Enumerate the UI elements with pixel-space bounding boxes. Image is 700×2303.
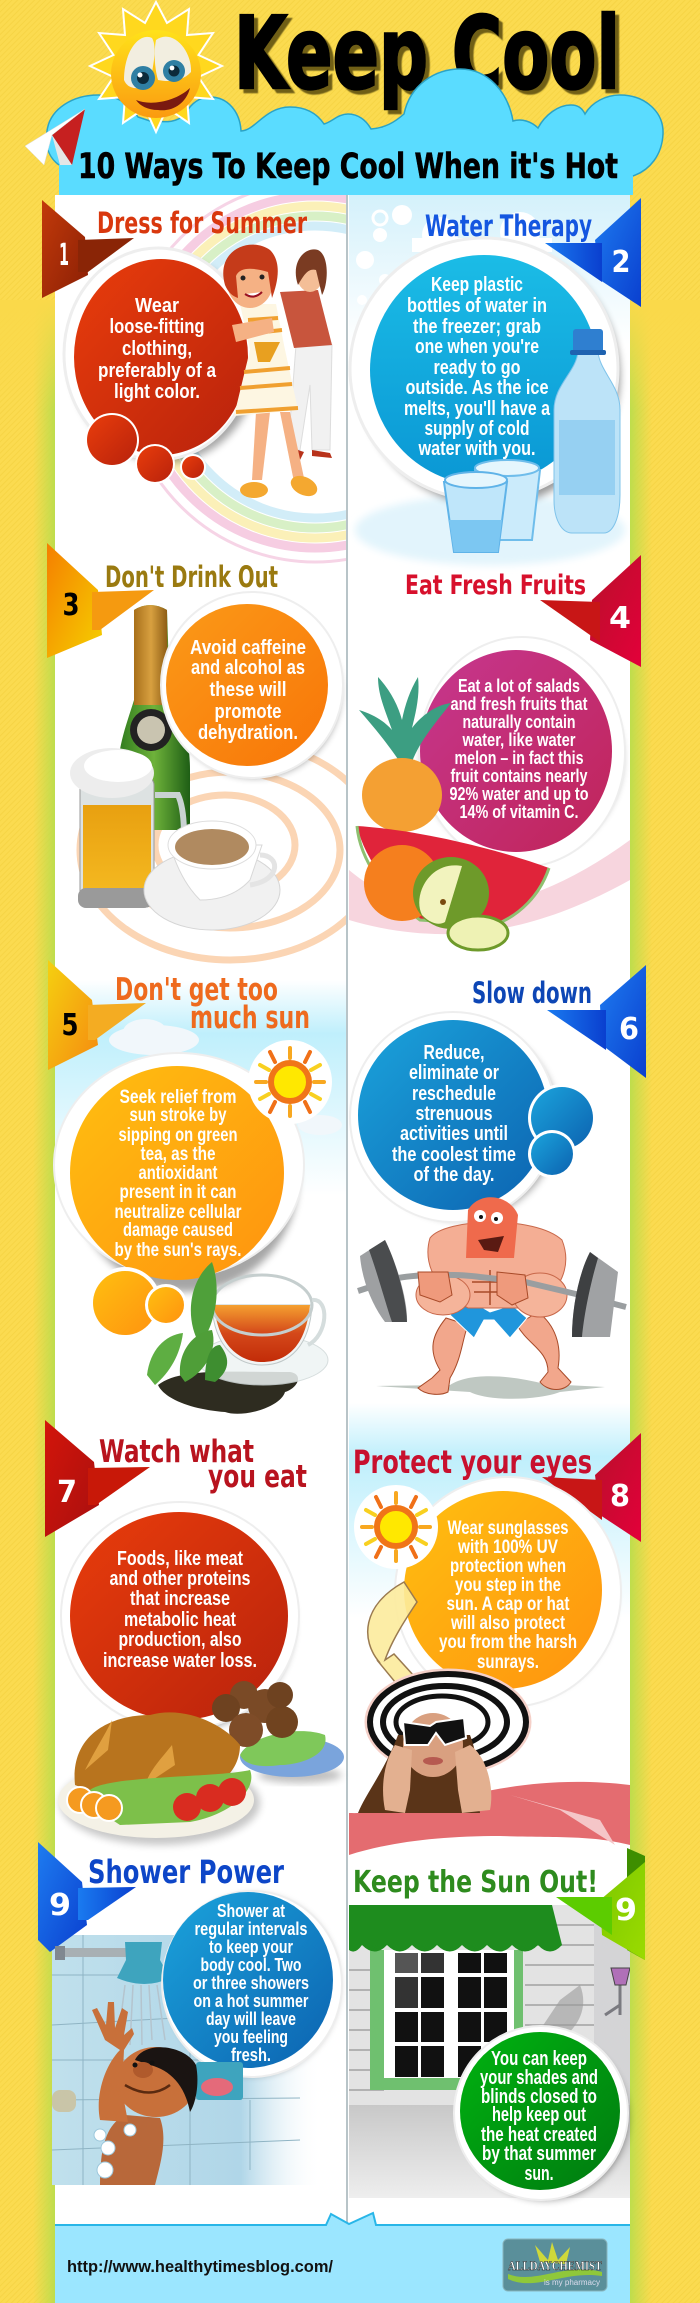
speech bubble: neutralize cellular: [114, 1202, 242, 1223]
sky background: [349, 1403, 630, 1618]
red wave: [349, 1782, 630, 1855]
speech bubble: the coolest time: [392, 1144, 516, 1166]
ribbon 5: [48, 960, 146, 1070]
tiled wall: [52, 1935, 322, 2185]
ribbon 3: 3: [62, 588, 80, 623]
speech bubble: Seek relief from: [120, 1087, 236, 1108]
speech bubble: antioxidant: [138, 1163, 218, 1184]
panel 4: eat fresh fruits: [349, 555, 641, 950]
speech bubble: metabolic heat: [124, 1609, 236, 1631]
speech bubble: ready to go: [434, 357, 520, 379]
panel 9: shower power: [38, 1842, 342, 2185]
speech bubble: to keep your: [209, 1936, 293, 1957]
speech bubble: [161, 592, 343, 778]
illustration: water bottle and glasses: [444, 329, 620, 552]
ribbon 8: [542, 1433, 641, 1542]
panel 7: watch what you eat: [45, 1420, 344, 1845]
speech bubble: you from the harsh: [439, 1632, 577, 1653]
speech bubble: melts, you'll have a: [404, 398, 551, 420]
heading: [115, 972, 310, 1036]
heading: Dress for Summer: [97, 206, 307, 240]
ribbon 10: [556, 1848, 645, 1960]
speech bubble: you step in the: [455, 1575, 561, 1596]
ribbon 4: [540, 555, 641, 667]
ribbon 4: 4: [609, 601, 631, 636]
speech bubble: production, also: [118, 1629, 242, 1651]
speech bubble: by the sun's rays.: [114, 1240, 242, 1261]
speech bubble: dehydration.: [198, 722, 298, 744]
pink swoosh: [349, 840, 630, 934]
ribbon 1: [42, 200, 134, 298]
logo: ALLDAYCHEMIST: [508, 2258, 602, 2273]
speech bubble: preferably of a: [98, 360, 217, 382]
speech bubble: reschedule: [412, 1083, 496, 1105]
speech bubble: eliminate or: [409, 1062, 499, 1084]
orange swirl: [76, 755, 346, 964]
heading: Don't get too: [115, 972, 278, 1008]
illustration: two women: [223, 245, 332, 500]
ribbon 2: [545, 198, 641, 307]
speech bubble: with 100% UV: [457, 1537, 558, 1558]
speech bubble: Avoid caffeine: [190, 637, 306, 659]
speech bubble: Wear: [135, 295, 179, 317]
speech bubble: 92% water and up to: [450, 783, 588, 804]
arrow: [368, 1582, 424, 1688]
heading: you eat: [208, 1459, 307, 1495]
speech bubble: protection when: [450, 1556, 566, 1577]
speech bubble: help keep out: [492, 2104, 586, 2126]
speech bubble: tea, as the: [140, 1144, 216, 1165]
speech bubble: [395, 1477, 621, 1707]
speech bubble: sipping on green: [118, 1125, 238, 1146]
ribbon 7: [45, 1420, 150, 1537]
speech bubble: water with you.: [418, 438, 536, 460]
illustration: woman in sun hat: [358, 1670, 530, 1813]
heading: Don't Drink Out: [105, 560, 278, 594]
speech bubble: regular intervals: [194, 1918, 308, 1939]
speech bubble: sunrays.: [477, 1652, 539, 1673]
speech bubble: water, like water: [462, 729, 576, 750]
speech bubble: on a hot summer: [194, 1990, 308, 2011]
speech bubble: light color.: [114, 381, 200, 403]
speech bubble: of the day.: [414, 1164, 494, 1186]
speech bubble: [162, 1891, 342, 2077]
illustration: house and window: [349, 1905, 630, 2198]
panel 3: don't drink out: [47, 543, 380, 960]
speech bubble: Shower at: [217, 1900, 285, 1921]
cloud: [109, 1019, 342, 1135]
ribbon 6: [547, 965, 646, 1078]
speech bubble: damage caused: [123, 1220, 233, 1241]
speech bubble: the heat created: [481, 2124, 597, 2146]
speech bubble: bottles of water in: [407, 295, 547, 317]
speech bubble: fresh.: [231, 2044, 271, 2065]
ribbon 7: 7: [57, 1475, 77, 1510]
heading: Watch what: [99, 1434, 254, 1470]
icon: sun: [354, 1485, 438, 1569]
speech bubble: [350, 238, 620, 506]
speech bubble: by that summer: [482, 2143, 596, 2165]
speech bubble: increase water loss.: [103, 1650, 257, 1672]
speech bubble: [54, 1053, 304, 1339]
ribbon 2: 2: [612, 245, 630, 280]
illustration: coffee cup: [144, 821, 280, 930]
heading: Water Therapy: [425, 209, 592, 243]
logo: [503, 2239, 607, 2291]
heading: much sun: [190, 1000, 310, 1036]
ribbon 10: 9: [615, 1893, 637, 1928]
footer: [55, 2213, 630, 2303]
panel 1: dress for summer: [42, 195, 346, 564]
illustration: green tea: [147, 1262, 328, 1414]
ribbon 5: 5: [62, 1008, 78, 1043]
icon: sun: [248, 1040, 332, 1124]
speech bubble: or three showers: [193, 1972, 309, 1993]
speech bubble: Wear sunglasses: [448, 1518, 568, 1539]
illustration: soap dish and knob: [52, 2062, 243, 2112]
speech bubble: will also protect: [450, 1613, 566, 1634]
illustration: boy showering: [92, 2002, 197, 2185]
ribbon 3: [47, 543, 154, 658]
water splash background: [349, 195, 630, 565]
speech bubble: [454, 2026, 628, 2200]
rainbow arcs: [160, 195, 346, 564]
speech bubble: you feeling: [214, 2026, 288, 2047]
ribbon 6: 6: [619, 1012, 639, 1047]
speech bubble: present in it can: [120, 1182, 236, 1203]
speech bubble: one when you're: [415, 336, 539, 358]
panel 10: keep the sun out: [349, 1848, 645, 2200]
main white panel: [55, 195, 630, 2303]
speech bubble: Keep plastic: [431, 274, 523, 296]
panel 5: don't get too much sun: [48, 960, 346, 1414]
speech bubble: Foods, like meat: [117, 1548, 243, 1570]
speech bubble: body cool. Two: [200, 1954, 302, 1975]
speech bubble: sun. A cap or hat: [446, 1594, 570, 1615]
speech bubble: naturally contain: [462, 711, 576, 732]
logo: is my pharmacy: [544, 2278, 600, 2287]
speech bubble: 14% of vitamin C.: [460, 801, 578, 822]
speech bubble: strenuous: [416, 1103, 492, 1125]
illustration: champagne bottle: [118, 605, 190, 830]
speech bubble: your shades and: [480, 2067, 598, 2089]
speech bubble: and fresh fruits that: [450, 693, 588, 714]
speech bubble: Eat a lot of salads: [458, 675, 580, 696]
illustration: shower head: [55, 1942, 170, 2045]
ribbon 8: 8: [610, 1479, 630, 1514]
heading: Keep the Sun Out!: [353, 1865, 598, 1900]
speech bubble: sun stroke by: [130, 1105, 227, 1126]
panel 6: slow down: [350, 965, 646, 1399]
header cloud band: [46, 69, 663, 195]
speech bubble: [419, 637, 625, 867]
speech bubble: blinds closed to: [481, 2086, 597, 2108]
heading: Shower Power: [88, 1853, 284, 1891]
speech bubble: loose-fitting: [110, 316, 204, 338]
speech bubble: fruit contains nearly: [450, 765, 588, 786]
speech bubble: sun.: [524, 2163, 554, 2185]
ribbon 9: 9: [49, 1888, 71, 1923]
speech bubble: clothing,: [122, 338, 192, 360]
speech bubble: You can keep: [491, 2048, 587, 2070]
heading: Slow down: [472, 976, 592, 1010]
speech bubble: that increase: [130, 1588, 230, 1610]
speech bubble: and other proteins: [110, 1568, 250, 1590]
speech bubble: [64, 248, 259, 484]
speech bubble: promote: [214, 701, 282, 723]
heading: Eat Fresh Fruits: [405, 570, 586, 601]
sky background: [55, 980, 346, 1195]
footer band: [55, 2213, 630, 2303]
panel 2: water therapy: [349, 195, 641, 565]
speech bubble: and alcohol as: [191, 657, 305, 679]
illustration: fruits: [357, 677, 549, 950]
speech bubble: these will: [210, 679, 286, 701]
speech bubble: day will leave: [206, 2008, 296, 2029]
speech bubble: [61, 1502, 299, 1730]
panel 8: protect your eyes: [349, 1403, 641, 1855]
ribbon 9: [38, 1842, 136, 1952]
speech bubble: Reduce,: [424, 1042, 484, 1064]
speech bubble: supply of cold: [424, 418, 530, 440]
speech bubble: melon – in fact this: [454, 747, 584, 768]
speech bubble: activities until: [400, 1123, 508, 1145]
heading: [99, 1434, 307, 1495]
speech bubble: the freezer; grab: [413, 316, 541, 338]
source url: http://www.healthytimesblog.com/: [67, 2257, 333, 2276]
icon: smiling sun: [90, 2, 222, 132]
illustration: beer mug: [70, 748, 184, 908]
speech bubble: [350, 1012, 596, 1222]
icon: paper plane: [25, 109, 85, 165]
illustration: roast and meatballs: [58, 1681, 344, 1845]
heading: Protect your eyes: [353, 1443, 592, 1481]
illustration: weightlifter: [358, 1197, 626, 1399]
ribbon 1: 1: [59, 238, 69, 273]
speech bubble: outside. As the ice: [406, 377, 548, 399]
